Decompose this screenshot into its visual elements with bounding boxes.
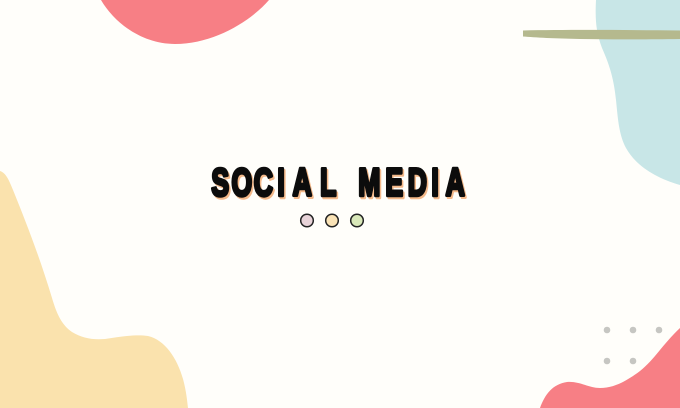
top right blue blob	[596, 0, 680, 185]
title: SOCIAL MEDIA	[213, 164, 466, 207]
olive bar	[523, 30, 680, 39]
grey dots	[604, 327, 662, 364]
three status circles	[301, 214, 363, 227]
top coral blob	[101, 0, 269, 44]
bottom right coral blob	[540, 328, 680, 408]
bottom left yellow blob	[0, 171, 188, 408]
title: SOCIAL MEDIA	[211, 162, 465, 205]
